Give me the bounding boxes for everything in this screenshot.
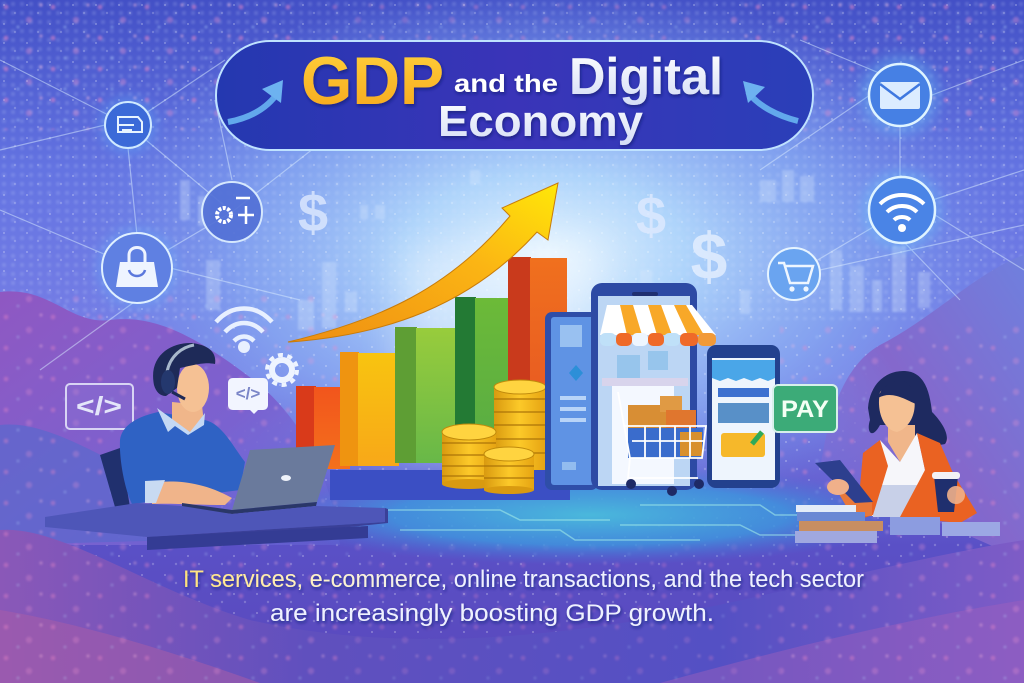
woman with tablet: [815, 371, 977, 523]
big phone storefront: [591, 283, 716, 490]
shopping cart: [618, 392, 706, 496]
dollar signs: [298, 183, 727, 293]
chair: [100, 448, 130, 507]
title text: Digital: [569, 48, 723, 106]
network lines: [0, 40, 1024, 370]
banner pill: [216, 41, 813, 150]
dollar signs: $: [298, 183, 328, 243]
bar chart: [296, 250, 600, 500]
bar 2: [340, 352, 399, 466]
caption: [183, 566, 864, 627]
icon: wifi: [216, 308, 272, 353]
hand: [827, 479, 849, 495]
left phone: [545, 312, 598, 490]
coin stack front: [484, 447, 534, 494]
man at laptop: [100, 343, 335, 514]
bar 4: [455, 297, 513, 452]
desk: [45, 503, 388, 550]
bar 1: [296, 386, 350, 469]
title text: Economy: [438, 97, 644, 146]
headset: [161, 345, 194, 399]
right phone: [707, 345, 780, 488]
icon: code bubble: </>: [236, 384, 260, 403]
icon: cart circle: [768, 248, 820, 300]
face: [879, 387, 915, 432]
icon: envelope circle: [860, 55, 940, 135]
growth arrow: [288, 183, 558, 342]
coin stack left: [442, 424, 496, 489]
shirt: [872, 433, 925, 516]
arm: [832, 478, 872, 516]
neck: [888, 425, 915, 462]
icon: card circle: [100, 97, 156, 153]
coin stack back: [494, 380, 546, 470]
sweater: [120, 412, 245, 504]
pay button: PAY: [781, 396, 829, 423]
coin stacks: [442, 380, 546, 494]
hills: [0, 255, 1024, 683]
dollar signs: $: [636, 186, 666, 246]
fringe: [878, 381, 916, 404]
bar 5: [508, 257, 567, 407]
blazer: [857, 433, 977, 523]
icon: right arrow: [743, 81, 798, 121]
title banner: [216, 41, 813, 150]
icon: code box: [66, 384, 133, 429]
title text: GDP: [301, 43, 444, 119]
bar 3: [395, 327, 457, 463]
books: [795, 505, 1000, 543]
arm: [152, 482, 232, 505]
floor platform: [260, 465, 920, 565]
icon: shopping bag circle: [97, 228, 177, 308]
dollar signs: $: [691, 219, 727, 293]
icon: code box: </>: [76, 391, 122, 421]
title text: [301, 43, 723, 146]
icon: left arrow: [228, 80, 283, 122]
icon: wifi circle: [862, 170, 942, 250]
icon: code bubble: [228, 378, 268, 414]
title text: and the: [454, 70, 558, 98]
coffee cup: [932, 472, 965, 512]
caption: IT services, e-commerce, online transactions, and the tech sector: [183, 566, 864, 593]
head: [177, 364, 209, 412]
awning: [600, 305, 716, 346]
pay button: [773, 385, 837, 432]
tablet: [815, 460, 873, 503]
icon: gear: [267, 355, 297, 385]
caption: are increasingly boosting GDP growth.: [270, 600, 714, 627]
hair: [153, 343, 215, 396]
hair: [868, 371, 947, 445]
icon: gear plus circle: [202, 182, 262, 242]
neck and collar: [172, 402, 204, 432]
laptop: [182, 445, 335, 514]
